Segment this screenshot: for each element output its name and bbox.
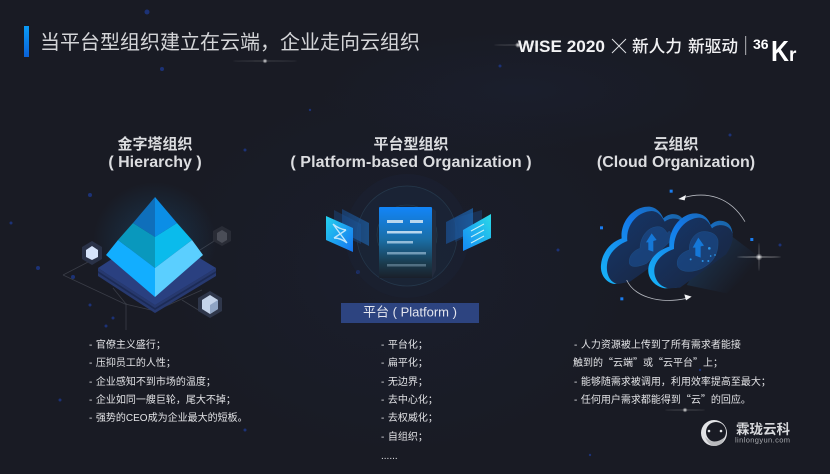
heading: cloud (597, 136, 755, 171)
blue particles (600, 190, 753, 300)
list: platform: - 去权威化； (381, 409, 438, 424)
list: hierarchy: - 压抑员工的人性； (89, 354, 176, 369)
header brand: r (789, 45, 797, 66)
platform label (341, 303, 479, 323)
title accent bar (24, 26, 29, 57)
heading: hierarchy (108, 135, 202, 171)
platform label: 平台 ( Platform ) (363, 304, 457, 320)
heading: cloud: 云组织 (653, 136, 699, 153)
document panel (379, 207, 436, 278)
list: platform: - 无边界； (381, 373, 428, 388)
header brand: 36 (753, 36, 769, 52)
list: hierarchy: - 企业感知不到市场的温度； (89, 373, 216, 388)
list: cloud: - 任何用户需求都能得到“云”的回应。 (574, 391, 751, 406)
header brand: K (771, 36, 789, 68)
logo: linlongyun: linlongyun.com (735, 436, 790, 444)
logo: linlongyun (701, 420, 790, 446)
header brand: 新驱动 (688, 37, 738, 56)
icon: grey cube (213, 226, 231, 246)
front cloud (648, 213, 733, 288)
list: hierarchy (89, 336, 248, 424)
heading: hierarchy: ( Hierarchy ) (108, 154, 202, 171)
platform illustration (326, 174, 491, 298)
list: platform: ...... (381, 451, 398, 462)
list: platform: - 自组织； (381, 428, 428, 443)
heading: platform (290, 135, 532, 171)
list: hierarchy: - 企业如同一艘巨轮，尾大不掉； (89, 391, 236, 406)
list: cloud (573, 338, 771, 406)
heading: platform: 平台型组织 (373, 135, 449, 153)
header brand: 新人力 (632, 37, 682, 56)
right cards (446, 208, 491, 251)
pyramid illustration (63, 182, 231, 330)
back cloud (601, 207, 686, 284)
list: platform (381, 336, 438, 462)
heading: cloud: (Cloud Organization) (597, 154, 755, 171)
heading: platform: ( Platform-based Organization ) (290, 154, 532, 171)
icon: left cube (82, 241, 102, 265)
list: platform: - 去中心化； (381, 391, 438, 406)
icon: lower cube (198, 291, 222, 318)
logo: linlongyun: 霖珑云科 (736, 421, 790, 437)
list: platform: - 平台化； (381, 336, 428, 351)
list: cloud: 触到的“云端”或“云平台”上； (573, 354, 723, 369)
header brand (518, 36, 797, 68)
list: cloud: - 人力资源被上传到了所有需求者能接 (574, 338, 741, 351)
heading: hierarchy: 金字塔组织 (117, 135, 193, 153)
header brand: WISE 2020 (518, 37, 605, 56)
list: hierarchy: - 强势的CEO成为企业最大的短板。 (89, 411, 248, 424)
left cards (326, 209, 369, 252)
list: hierarchy: - 官僚主义盛行； (89, 336, 166, 351)
cloud illustration (600, 190, 763, 300)
list: cloud: - 能够随需求被调用，利用效率提高至最大； (574, 373, 771, 388)
title: 当平台型组织建立在云端，企业走向云组织 (40, 26, 420, 55)
rotation arrows (627, 195, 745, 300)
list: platform: - 扁平化； (381, 354, 428, 369)
